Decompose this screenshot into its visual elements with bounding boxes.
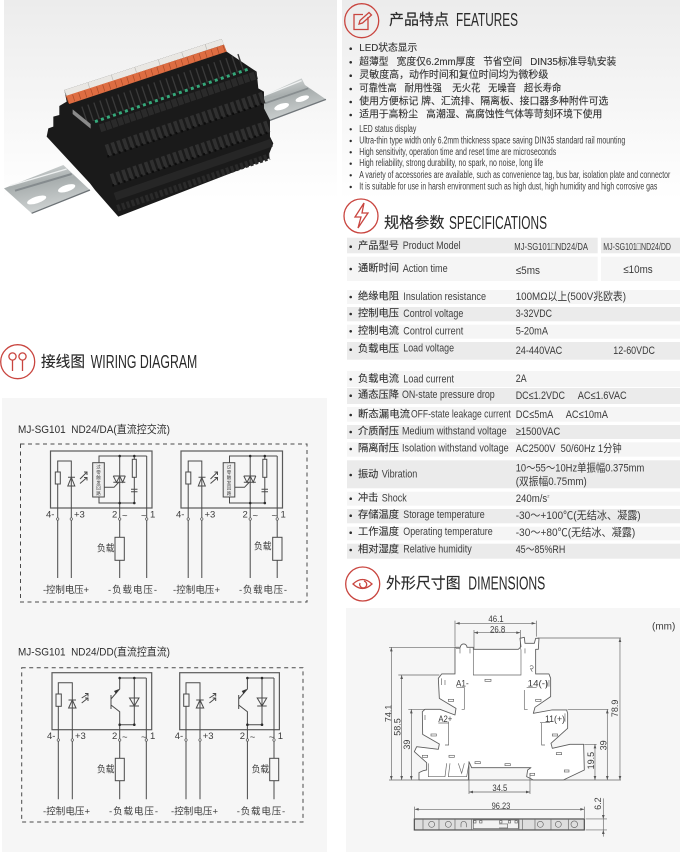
row: action time: Action time (403, 263, 448, 275)
row: action time: ≤10ms (623, 264, 653, 276)
row: shock: 冲击 (358, 491, 378, 504)
row: storage temperature: -30～+100℃(无结冰、凝露) (516, 508, 641, 522)
row: shock: 2 (547, 494, 550, 498)
row: off-state leakage current: 断态漏电流 (358, 408, 410, 420)
circuit: DA right: ~ (272, 510, 278, 522)
side view outline with dimensions (383, 614, 621, 794)
circuit: DA right: ~ (252, 510, 258, 522)
circuit: DD right: ~ (250, 732, 256, 743)
top view strip with dimensions (414, 797, 607, 837)
row: storage temperature: 存储温度 (358, 508, 399, 521)
circuit: DD left: +3 (75, 731, 86, 742)
heading: DD model: MJ-SG101 ND24/DD(直流控直流) (18, 644, 170, 658)
circuit: DA right: 2 (242, 510, 248, 520)
dashed frame: DD model (22, 668, 303, 822)
vertical label: zero trigger circuit: 零 (227, 469, 232, 475)
row: off-state leakage current (347, 407, 680, 422)
row: control voltage: 3-32VDC (516, 308, 552, 320)
features list: English (350, 124, 671, 192)
row: on-state pressure drop: DC≤1.2VDC (516, 390, 565, 402)
row: vibration (347, 460, 680, 488)
features list: Chinese: LED状态显示 (359, 41, 417, 54)
header: wiring diagram: WIRING DIAGRAM (91, 352, 197, 372)
top view strip with dimensions: 6.2 (593, 797, 603, 810)
vertical label: zero trigger circuit: 触 (96, 474, 101, 481)
circuit: DD right: -负载电压- (237, 806, 285, 818)
side view outline with dimensions: 14(-) (528, 679, 548, 689)
row: action time: 通断时间 (358, 262, 399, 274)
row: off-state leakage current: DC≤5mA (516, 409, 554, 421)
header: wiring diagram: 接线图 (41, 354, 85, 370)
top view strip with dimensions: 96.23 (492, 801, 510, 811)
features list: Chinese (349, 41, 616, 121)
circuit: DD right: ~ (269, 732, 275, 743)
row: operating temperature: -30～+80℃(无结冰、凝露) (516, 525, 635, 539)
row: isolation withstand voltage (347, 441, 680, 457)
vertical label: zero trigger circuit: 过 (96, 463, 101, 470)
header: dimensions (346, 567, 545, 601)
row: on-state pressure drop: ON-state pressure drop (402, 389, 495, 401)
circuit: DA right: -控制电压+ (173, 584, 220, 596)
row: operating temperature (347, 525, 680, 540)
row: vibration: (双振幅0.75mm) (516, 474, 587, 488)
icon: lightning (344, 199, 378, 233)
header: specifications (344, 199, 547, 233)
circuit: DD left: 1 (150, 731, 155, 742)
row: shock: Shock (382, 493, 407, 505)
row: load voltage: 负载电压 (358, 342, 399, 355)
circuit: DA right: 4- (176, 510, 184, 520)
row: relative humidity: 相对湿度 (358, 542, 399, 556)
row: control voltage: 控制电压 (358, 306, 399, 320)
icon: eye (346, 567, 380, 601)
row: insulation resistance: 100MΩ以上(500V兆欧表) (516, 289, 626, 303)
circuit: DD right: 2 (240, 731, 245, 742)
row: vibration: 10～55～10Hz单振幅0.375mm (516, 460, 644, 474)
side view outline with dimensions: 39 (402, 740, 412, 750)
row: on-state pressure drop: AC≤1.6VAC (578, 390, 627, 402)
circuit: DD right: 1 (278, 731, 283, 742)
row: load current: Load current (403, 373, 454, 385)
row: control current (347, 324, 680, 339)
row: on-state pressure drop: 通态压降 (358, 388, 399, 401)
header: wiring diagram (1, 345, 197, 379)
features list: Chinese: 灵敏度高，动作时间和复位时间均为微秒级 (359, 68, 548, 81)
circuit: DA left: ~ (141, 510, 147, 522)
circuit: DD right: -控制电压+ (171, 806, 218, 818)
row: vibration: 振动 (358, 468, 378, 480)
side view outline with dimensions: 19.5 (586, 752, 596, 769)
circuit: DA left (43, 451, 157, 596)
circuit: DA left: 2 (112, 510, 117, 520)
header: features: 产品特点 (389, 12, 449, 28)
header: specifications: SPECIFICATIONS (449, 213, 547, 233)
row: load current: 负载电流 (358, 372, 399, 385)
icon: wiring terminals (1, 345, 35, 379)
circuit: DD left: 负载 (97, 764, 115, 776)
row: storage temperature: Storage temperature (403, 509, 485, 521)
row: insulation resistance: Insulation resistance (403, 291, 486, 303)
circuit: DA right: +3 (204, 510, 215, 520)
features list: English: LED status display (359, 124, 416, 135)
circuit: DA left: ~ (122, 510, 128, 522)
circuit: DD left: ~ (122, 732, 128, 743)
side view outline with dimensions: 58.5 (393, 718, 403, 736)
row: load current (347, 371, 680, 387)
circuit: DD left: 4- (47, 731, 55, 742)
side view outline with dimensions: 74.1 (383, 705, 393, 722)
panel: dimensions drawing (346, 608, 680, 852)
circuit: DD right (171, 673, 285, 818)
product photo: relay modules on DIN rail (4, 39, 326, 217)
row: operating temperature: Operating temperature (403, 526, 493, 538)
row: action time (347, 257, 680, 281)
features list: Chinese: 可靠性高 耐用性强 无火花 无噪音 超长寿命 (359, 82, 561, 94)
row: product model (347, 238, 680, 253)
row: shock: 240m/s (516, 493, 548, 505)
row: relative humidity (347, 542, 680, 559)
vertical label: zero trigger circuit: 回 (227, 485, 232, 491)
row: isolation withstand voltage: AC2500V 50/60Hz 1分钟 (516, 441, 622, 455)
header: features (345, 4, 518, 38)
features list: English: High reliability, strong durability, no spark, no noise, long life (359, 158, 544, 169)
row: isolation withstand voltage: Isolation withstand voltage (402, 442, 509, 454)
row: on-state pressure drop (347, 388, 680, 404)
side view outline with dimensions: A2+ (438, 714, 452, 724)
row: product model: 产品型号 (358, 239, 399, 252)
specifications table (347, 238, 680, 559)
vertical label: zero trigger circuit: 过 (227, 463, 232, 470)
features list: Chinese: 使用方便标记 牌、汇流排、隔离板、接口器多种附件可选 (359, 94, 608, 108)
side view outline with dimensions: 39 (598, 740, 608, 750)
features list: Chinese: 超薄型 宽度仅6.2mm厚度 节省空间 DIN35标准导轨安装 (359, 55, 616, 68)
row: control voltage: Control voltage (403, 308, 463, 320)
vertical label: zero trigger circuit: 发 (96, 479, 101, 486)
row: load voltage (347, 342, 680, 360)
vertical label: zero trigger circuit: 回 (96, 485, 101, 491)
dashed frame: DA model (20, 444, 307, 602)
circuit: DD left: -负载电压- (109, 806, 158, 818)
circuit: DD left: 2 (112, 731, 117, 742)
features list: Chinese: 适用于高粉尘 高潮湿、高腐蚀性气体等苛刻环境下使用 (359, 108, 602, 120)
circuit: DA right: 负载 (254, 540, 272, 552)
vertical label: zero trigger circuit: 路 (227, 490, 232, 496)
side view outline with dimensions: 34.5 (492, 783, 507, 793)
side view outline with dimensions: 11(+) (545, 714, 565, 724)
circuit: DA left: 4- (46, 510, 54, 520)
row: isolation withstand voltage: 隔离耐压 (358, 442, 399, 454)
row: control current: Control current (403, 325, 463, 337)
circuit: DA left: -控制电压+ (43, 584, 89, 596)
circuit: DD right: +3 (203, 731, 214, 742)
header: specifications: 规格参数 (384, 214, 444, 232)
row: medium withstand voltage: ≥1500VAC (516, 426, 560, 438)
row: vibration: Vibration (382, 468, 417, 480)
row: relative humidity: 45～85%RH (516, 544, 565, 556)
row: off-state leakage current: OFF-state leakage current (411, 408, 511, 420)
row: control current: 5-20mA (516, 325, 549, 337)
circuit: DA right: 1 (280, 510, 286, 520)
header: dimensions: 外形尺寸图 (386, 575, 461, 592)
circuit: DA left: 1 (150, 510, 155, 520)
row: insulation resistance: 绝缘电阻 (358, 290, 399, 302)
unit label: (mm) (652, 622, 675, 632)
row: medium withstand voltage (347, 424, 680, 439)
row: storage temperature (347, 508, 680, 523)
vertical label: zero trigger circuit: 发 (227, 479, 232, 486)
side view outline with dimensions: 46.1 (488, 614, 504, 624)
row: insulation resistance (347, 289, 680, 304)
row: off-state leakage current: AC≤10mA (566, 409, 609, 421)
row: product model: MJ-SG101□ND24/DA (514, 241, 588, 253)
row: action time: ≤5ms (516, 265, 540, 277)
icon: edit (345, 4, 379, 38)
circuit: DA left: -负载电压- (108, 584, 157, 596)
vertical label: zero trigger circuit: 路 (96, 490, 101, 496)
row: product model: Product Model (403, 240, 461, 252)
row: medium withstand voltage: 介质耐压 (358, 424, 399, 438)
circuit: DA left: 负载 (97, 542, 115, 554)
side view outline with dimensions: 26.8 (490, 624, 505, 634)
circuit: DD right: 4- (175, 731, 183, 742)
row: shock (347, 491, 680, 506)
row: load voltage: Load voltage (403, 343, 454, 355)
side view outline with dimensions: A1- (456, 679, 469, 689)
header: dimensions: DIMENSIONS (468, 573, 545, 593)
circuit: DD left (43, 673, 158, 818)
circuit: DD left: ~ (141, 732, 147, 743)
side view outline with dimensions: 78.9 (610, 700, 620, 717)
features list: English: High sensitivity, operation time and reset time are microseconds (359, 147, 556, 158)
circuit: DA left: +3 (74, 510, 85, 520)
header: features: FEATURES (456, 10, 518, 30)
row: load voltage: 24-440VAC (516, 345, 562, 357)
row: operating temperature: 工作温度 (358, 525, 399, 538)
row: load current: 2A (516, 373, 527, 385)
heading: DA model: MJ-SG101 ND24/DA(直流控交流) (18, 422, 170, 436)
vertical label: zero trigger circuit: 触 (227, 474, 232, 481)
circuit: DA right: -负载电压- (239, 584, 287, 596)
panel: wiring diagrams (2, 398, 327, 852)
circuit: DD left: -控制电压+ (43, 806, 90, 818)
row: control current: 控制电流 (358, 324, 399, 337)
row: control voltage (347, 306, 680, 321)
row: medium withstand voltage: Medium withstand voltage (402, 426, 507, 438)
circuit: DA right (173, 451, 287, 596)
row: relative humidity: Relative humidity (403, 544, 472, 556)
row: load voltage: 12-60VDC (613, 345, 655, 357)
vertical label: zero trigger circuit: 零 (96, 469, 101, 475)
circuit: DD right: 负载 (252, 764, 270, 776)
